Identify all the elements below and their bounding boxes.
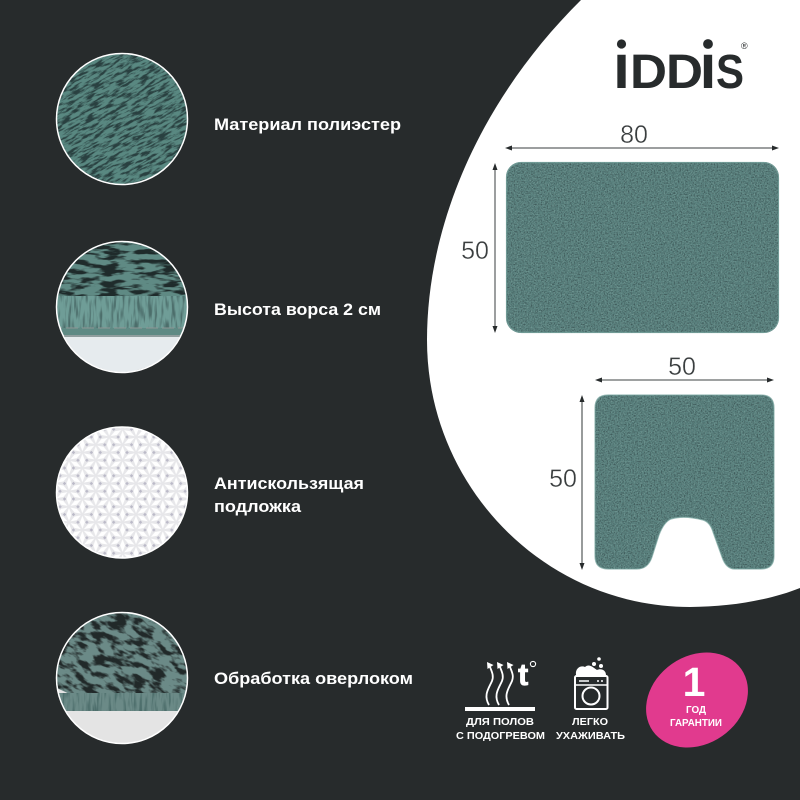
caption: heated floor bbox=[456, 716, 545, 742]
logo: IDDIS: ® bbox=[741, 41, 748, 51]
caption: heated floor: С ПОДОГРЕВОМ bbox=[456, 730, 545, 742]
logo: IDDIS: D bbox=[666, 46, 703, 99]
logo: IDDIS: S bbox=[716, 46, 744, 99]
feature photo: anti-slip backing bbox=[56, 427, 188, 558]
caption: easy care: ЛЕГКО bbox=[572, 716, 608, 728]
large bath mat bbox=[506, 162, 779, 333]
dimensions: small mat width: 50 bbox=[668, 353, 696, 381]
dimensions: large mat height: 50 bbox=[461, 237, 489, 265]
icon: heated floor bbox=[465, 657, 536, 711]
feature text: anti-slip backing bbox=[214, 475, 364, 516]
caption: easy care bbox=[556, 716, 625, 742]
feature text: anti-slip backing: Антискользящая bbox=[214, 475, 364, 493]
dimensions: large mat width bbox=[505, 121, 779, 150]
feature text: overlock: Обработка оверлоком bbox=[214, 670, 413, 688]
badge: 1 year warranty: ГОД bbox=[686, 704, 706, 716]
badge: 1 year warranty: ГАРАНТИИ bbox=[670, 717, 722, 729]
logo: IDDIS: I bbox=[614, 46, 630, 99]
badge: 1 year warranty: 1 bbox=[683, 659, 705, 705]
feature text: pile height: Высота ворса 2 см bbox=[214, 301, 381, 319]
logo: IDDIS bbox=[614, 39, 748, 99]
dimensions: large mat width: 80 bbox=[620, 121, 648, 149]
icon: washing machine bbox=[575, 657, 608, 709]
feature photo: pile height bbox=[56, 240, 188, 374]
feature photo: overlock edge bbox=[56, 612, 188, 744]
badge: 1 year warranty bbox=[628, 633, 766, 767]
feature photo: material pile bbox=[56, 52, 188, 186]
dimensions: small mat height bbox=[549, 395, 584, 570]
dimensions: small mat width bbox=[595, 353, 774, 382]
icon: heated floor: t bbox=[518, 657, 528, 692]
caption: heated floor: ДЛЯ ПОЛОВ bbox=[466, 716, 534, 728]
caption: easy care: УХАЖИВАТЬ bbox=[556, 730, 625, 742]
logo: IDDIS: D bbox=[630, 46, 667, 99]
logo: IDDIS: I bbox=[700, 46, 716, 99]
dimensions: small mat height: 50 bbox=[549, 465, 577, 493]
white curved panel bbox=[427, 0, 800, 607]
small contour toilet mat bbox=[595, 395, 774, 569]
dimensions: large mat height bbox=[461, 163, 498, 333]
feature text: anti-slip backing: подложка bbox=[214, 498, 302, 516]
feature text: material: Материал полиэстер bbox=[214, 116, 401, 134]
